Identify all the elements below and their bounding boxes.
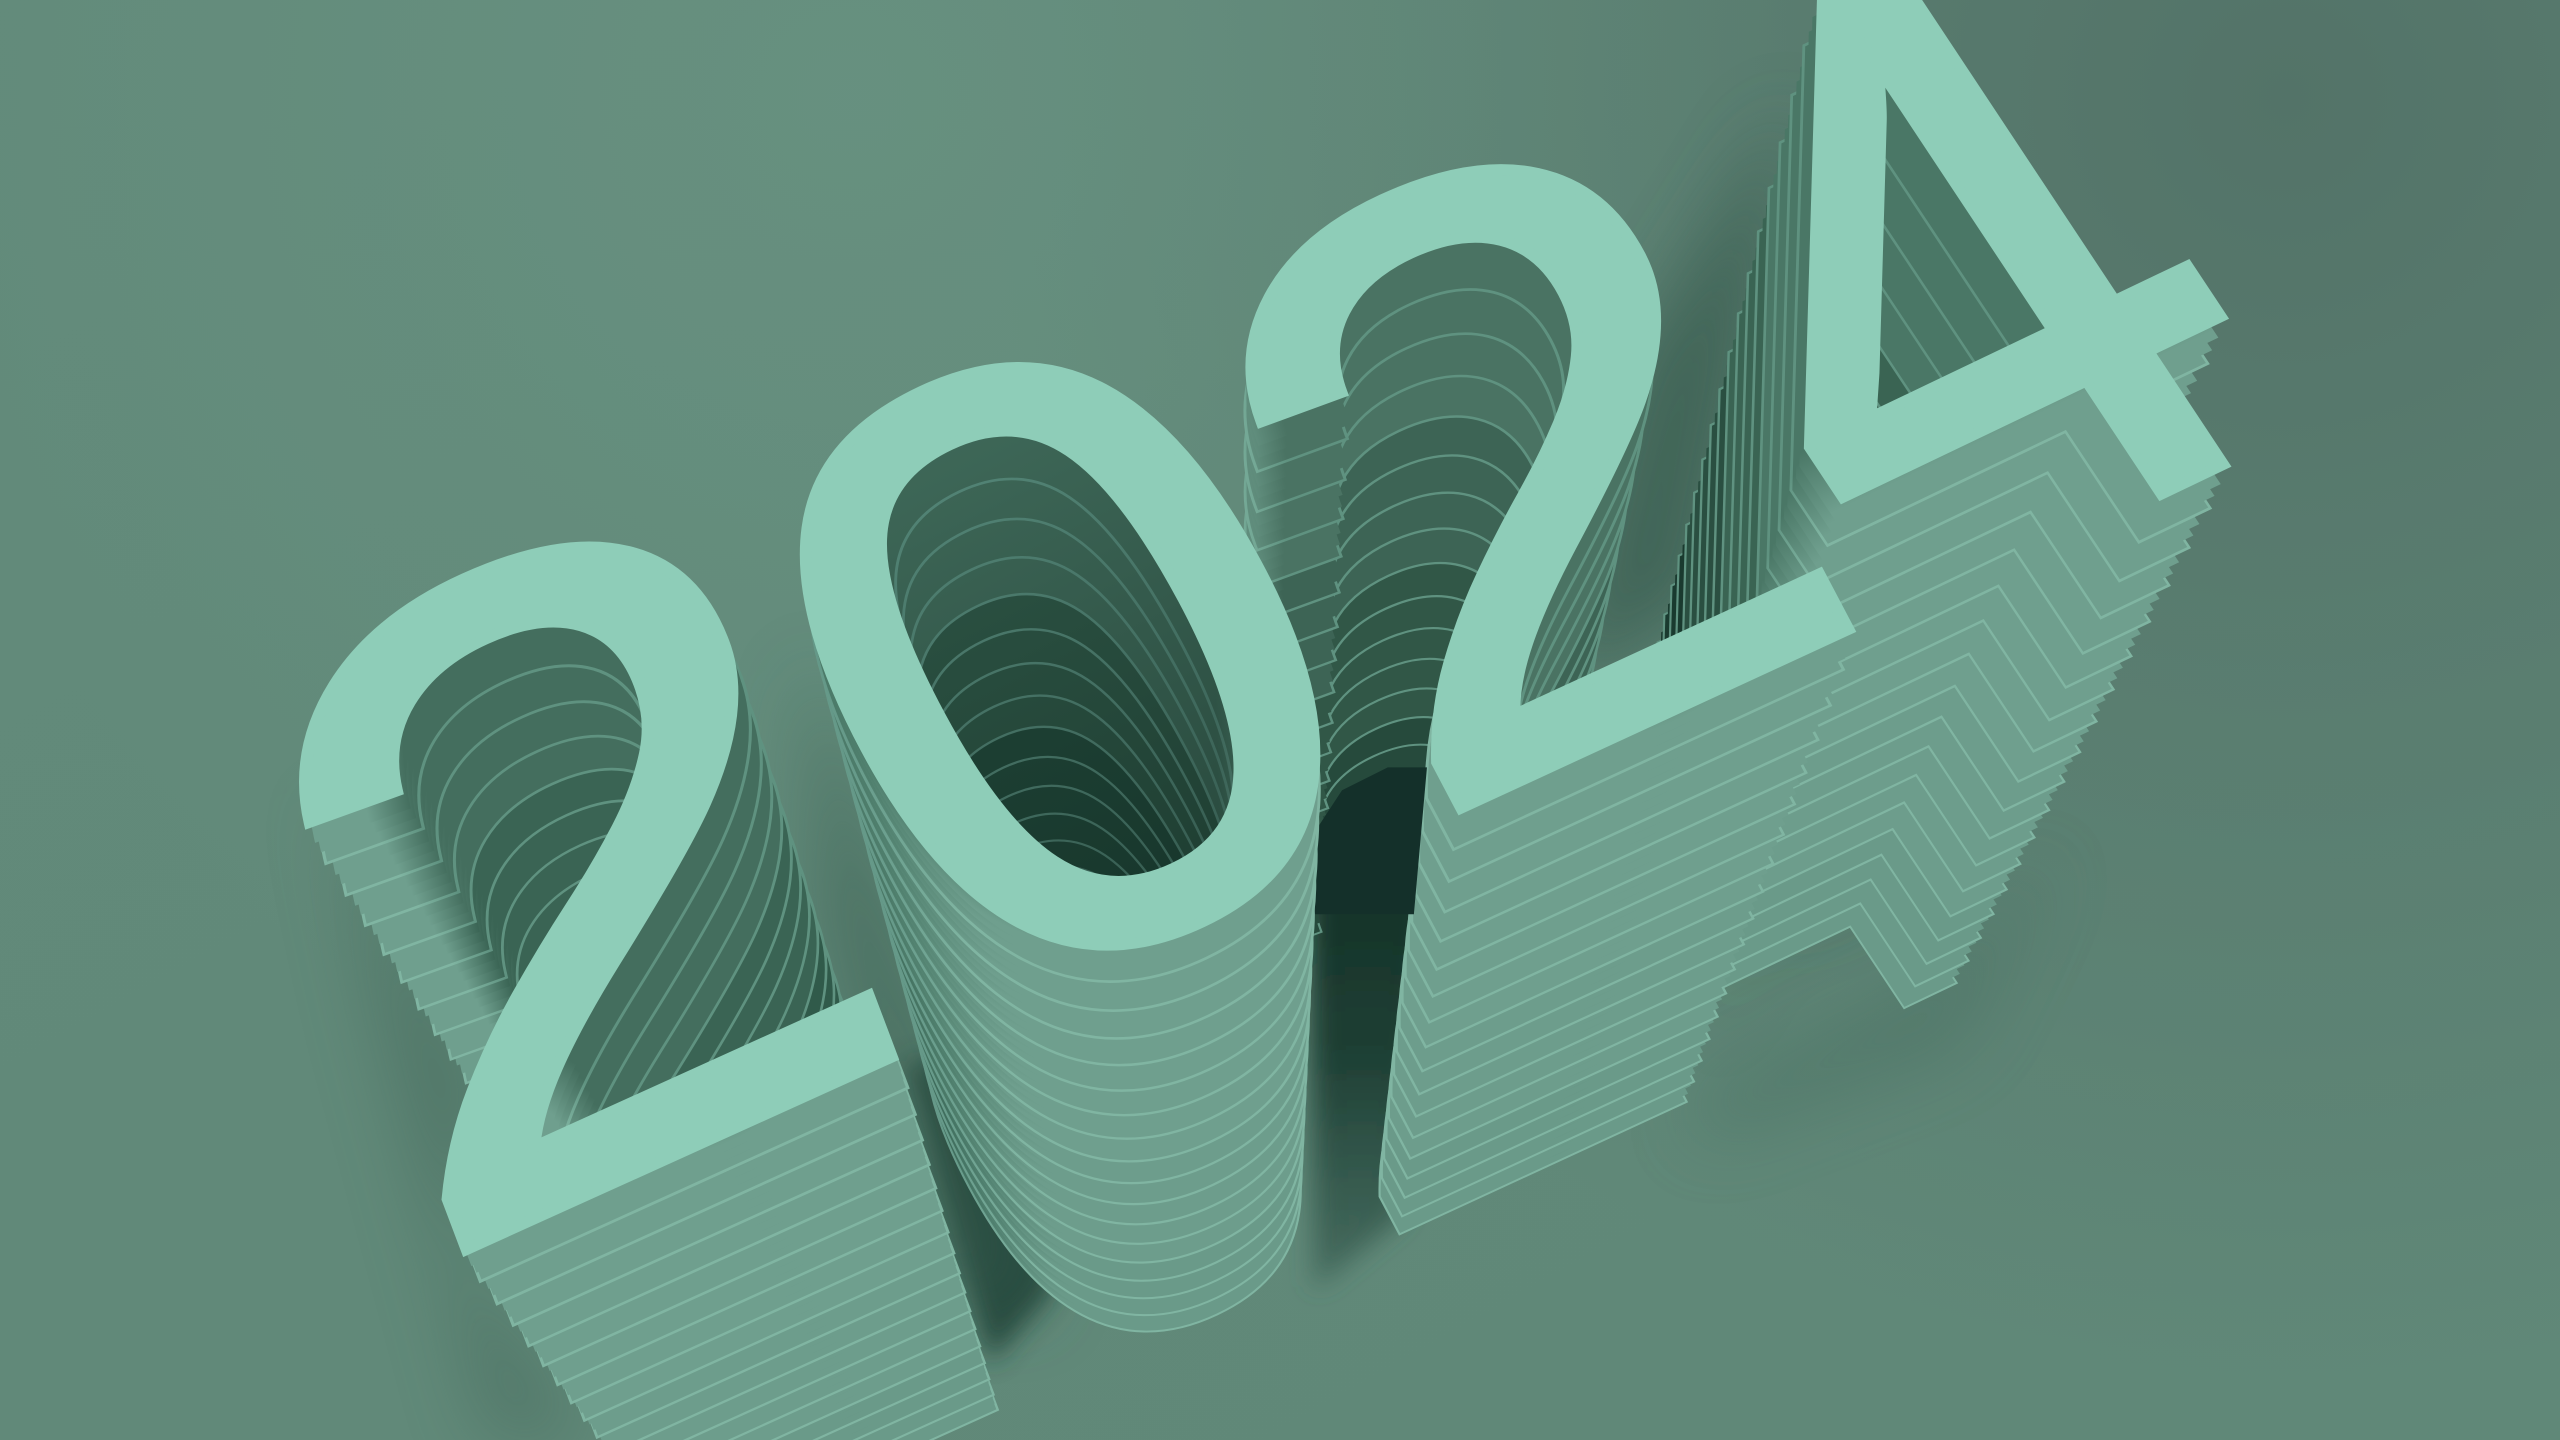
digit: 0: 0 — [732, 546, 1461, 1396]
digit 2 top face: 2 — [140, 293, 1004, 1440]
digit: 0: 0 — [745, 589, 1456, 1418]
digit: 0: 0 — [644, 244, 1497, 1239]
digit: 4: 4 — [1439, 54, 2285, 950]
digit: 0: 0 — [739, 570, 1459, 1408]
digit: 0: 0 — [668, 328, 1487, 1283]
digit: second 2: 2 — [1105, 458, 1815, 1276]
digit: second 2: 2 — [1084, 196, 1895, 1130]
digit: second 2: 2 — [1114, 573, 1780, 1340]
digit: 4: 4 — [1411, 401, 2127, 1159]
digit: 4: 4 — [1415, 346, 2152, 1126]
digit: 4: 4 — [1439, 69, 2279, 958]
digit: 0: 0 — [750, 608, 1454, 1428]
digit: 0: 0 — [767, 666, 1447, 1440]
digit: second 2: 2 — [1073, 42, 1943, 1044]
digit: 0: 0 — [651, 270, 1494, 1253]
digit: second 2: 2 — [1112, 544, 1789, 1324]
digit: second 2: 2 — [1115, 591, 1774, 1350]
digit: 4: 4 — [1433, 127, 2252, 994]
digit: 4: 4 — [1431, 156, 2239, 1011]
digit: 0: 0 — [726, 525, 1464, 1384]
digit: 0: 0 — [730, 537, 1463, 1391]
digit: 0: 0 — [639, 227, 1500, 1230]
digit: 0: 0 — [676, 354, 1484, 1296]
ground shadows — [327, 98, 2057, 1440]
digit: second 2: 2 — [1113, 562, 1783, 1334]
digit: 0: 0 — [765, 659, 1448, 1440]
digit: 4 — [1405, 0, 2420, 1204]
digit: second 2: 2 — [1092, 293, 1866, 1183]
digit: second 2: 2 — [1102, 425, 1825, 1257]
digit: 0: 0 — [684, 381, 1481, 1310]
digit: 0: 0 — [763, 649, 1449, 1440]
digit: second 2: 2 — [1087, 224, 1887, 1145]
digit: 4: 4 — [1439, 69, 2279, 958]
digit: second 2: 2 — [1080, 136, 1913, 1097]
digit: second 2: 2 — [1103, 437, 1822, 1264]
digit: 0: 0 — [676, 354, 1484, 1296]
digit: second 2: 2 — [1111, 533, 1793, 1318]
digit: 0: 0 — [702, 443, 1473, 1342]
digit: 0: 0 — [660, 301, 1491, 1269]
digit: second 2: 2 — [1102, 415, 1828, 1252]
digit: 4: 4 — [1410, 414, 2121, 1166]
digit: second 2: 2 — [1068, 0, 1958, 1016]
digit: second 2: 2 — [1109, 513, 1798, 1307]
digit 0 top face: 0 — [610, 130, 1511, 1180]
digit: second 2: 2 — [1116, 602, 1771, 1356]
digit: 0: 0 — [753, 619, 1452, 1433]
digit: 4: 4 — [1418, 311, 2168, 1104]
digit: second 2: 2 — [1107, 482, 1808, 1290]
digit: 4: 4 — [1436, 99, 2265, 977]
digit: second 2: 2 — [1096, 343, 1850, 1212]
digit: 0: 0 — [699, 431, 1475, 1336]
digit: 4: 4 — [1405, 463, 2098, 1196]
digit: 0: 0 — [625, 180, 1505, 1206]
digit: second 2: 2 — [1114, 580, 1778, 1344]
digit: 0: 0 — [620, 165, 1507, 1198]
digit: 4: 4 — [1443, 24, 2300, 931]
digit: second 2: 2 — [1085, 210, 1891, 1138]
digit: 0: 0 — [730, 537, 1463, 1391]
digit: 4: 4 — [1405, 476, 2093, 1204]
digit: second 2: 2 — [1107, 482, 1808, 1290]
digit: 0: 0 — [759, 639, 1450, 1440]
digit: 0: 0 — [757, 631, 1451, 1440]
digit: 4: 4 — [1414, 355, 2148, 1131]
digit: 0: 0 — [625, 180, 1505, 1206]
digit: 4: 4 — [1446, 0, 2314, 913]
digit: second 2: 2 — [1100, 391, 1836, 1238]
digit: 0: 0 — [681, 369, 1483, 1304]
digit: 4: 4 — [1417, 334, 2158, 1118]
digit: second 2: 2 — [1108, 491, 1805, 1294]
digit: first 2: 2 — [175, 357, 1012, 1440]
digit: 0: 0 — [748, 600, 1455, 1424]
digit: 0: 0 — [630, 198, 1503, 1215]
digit: 4: 4 — [1432, 142, 2245, 1002]
digit: 0: 0 — [616, 151, 1509, 1191]
digit: 4: 4 — [1437, 84, 2272, 968]
digit: 4: 4 — [1443, 24, 2300, 931]
digit: second 2: 2 — [1080, 136, 1913, 1097]
digit: 4: 4 — [1407, 445, 2107, 1185]
digit: 4: 4 — [1412, 380, 2136, 1146]
digit: 4: 4 — [1418, 311, 2168, 1104]
digit: 4: 4 — [1427, 196, 2220, 1035]
digit: 4: 4 — [1424, 236, 2202, 1059]
digit: 4: 4 — [1435, 113, 2259, 985]
digit: 4: 4 — [1415, 346, 2152, 1126]
digit: second 2: 2 — [1106, 470, 1812, 1283]
digit: second 2: 2 — [1076, 90, 1928, 1071]
digit: 0: 0 — [647, 257, 1496, 1246]
digit: second 2: 2 — [1114, 573, 1780, 1340]
digit: second 2: 2 — [1102, 415, 1828, 1252]
digit: 0: 0 — [748, 600, 1455, 1424]
digit: second 2: 2 — [1108, 501, 1802, 1300]
digit: 0: 0 — [706, 456, 1472, 1349]
digit: 4: 4 — [1422, 275, 2185, 1082]
digit: 0: 0 — [709, 468, 1471, 1355]
digit: 4: 4 — [1410, 414, 2121, 1166]
digit: 4: 4 — [1441, 40, 2292, 941]
digit: second 2: 2 — [1076, 90, 1928, 1071]
digit: 0: 0 — [739, 570, 1459, 1408]
digit: second 2: 2 — [1093, 305, 1862, 1191]
digit: 4: 4 — [1408, 433, 2112, 1178]
digit: 4: 4 — [1409, 420, 2117, 1170]
digit: 4: 4 — [1427, 196, 2220, 1035]
digit: 4: 4 — [1431, 156, 2239, 1011]
digit: 0: 0 — [664, 314, 1489, 1275]
digit: 0: 0 — [736, 558, 1460, 1402]
digit: 4: 4 — [1419, 298, 2174, 1096]
digit: 4: 4 — [1425, 222, 2208, 1051]
digit: 0: 0 — [664, 314, 1489, 1275]
digit: second 2: 2 — [1104, 449, 1818, 1271]
digit: second 2: 2 — [1090, 266, 1874, 1169]
digit: 0: 0 — [757, 631, 1451, 1440]
digit: 0: 0 — [695, 419, 1476, 1329]
digit: second 2: 2 — [1093, 305, 1862, 1191]
digit: second 2: 2 — [1083, 181, 1900, 1121]
digit: first 2: 2 — [165, 338, 1009, 1440]
digit: second 2: 2 — [1097, 355, 1847, 1218]
digit: 0: 0 — [723, 513, 1465, 1378]
digit: 4: 4 — [1406, 451, 2103, 1189]
digit: 4: 4 — [1417, 320, 2163, 1110]
digit: 0: 0 — [699, 431, 1475, 1336]
digit: 4: 4 — [1427, 209, 2214, 1043]
digit: second 2: 2 — [1110, 521, 1796, 1312]
digit: second 2: 2 — [1116, 602, 1771, 1356]
digit: second 2: 2 — [1072, 28, 1947, 1036]
digit: 4: 4 — [1444, 9, 2307, 922]
digit: 4: 4 — [1435, 113, 2259, 985]
digit: 4: 4 — [1447, 0, 2322, 902]
digit: first 2: 2 — [165, 338, 1009, 1440]
digit: 4: 4 — [1407, 445, 2107, 1185]
digit: 4: 4 — [1412, 380, 2136, 1146]
digit: first 2: 2 — [150, 312, 1006, 1440]
digit: second 2: 2 — [1109, 513, 1798, 1307]
digit: 4: 4 — [1405, 476, 2093, 1204]
digit: 0: 0 — [672, 341, 1486, 1290]
digit: 4: 4 — [1420, 285, 2180, 1089]
digit: second 2: 2 — [1081, 154, 1908, 1106]
digit: second 2: 2 — [1094, 318, 1858, 1198]
digit: second 2: 2 — [1112, 551, 1787, 1328]
digit: 0: 0 — [765, 659, 1448, 1440]
digit: second 2: 2 — [1099, 380, 1839, 1232]
digit: second 2: 2 — [1083, 181, 1900, 1121]
digit: 0: 0 — [639, 227, 1500, 1230]
digit: 4: 4 — [1423, 262, 2191, 1074]
digit: 4: 4 — [1422, 275, 2185, 1082]
digit: 0: 0 — [651, 270, 1494, 1253]
digit: second 2: 2 — [1077, 108, 1922, 1081]
digit: 0: 0 — [742, 578, 1457, 1412]
digit: 0: 0 — [719, 503, 1466, 1373]
digit: second 2: 2 — [1098, 367, 1843, 1225]
digit: second 2: 2 — [1068, 0, 1958, 1016]
digit: 0: 0 — [688, 394, 1480, 1317]
digit: 4: 4 — [1412, 389, 2133, 1151]
digit: second 2: 2 — [1104, 449, 1818, 1271]
digit: second 2: 2 — [1112, 544, 1789, 1324]
digit: 0: 0 — [716, 490, 1468, 1367]
digit: 0: 0 — [688, 394, 1480, 1317]
digit: 4: 4 — [1447, 0, 2322, 902]
digit: second 2: 2 — [1067, 0, 1963, 1007]
digit: second 2: 2 — [1096, 343, 1850, 1212]
digit: 4: 4 — [1424, 249, 2197, 1067]
digit: second 2: 2 — [1087, 224, 1887, 1145]
digit: 4: 4 — [1413, 367, 2142, 1138]
digit: 0: 0 — [634, 212, 1501, 1223]
digit: second 2: 2 — [1089, 252, 1878, 1161]
digit: second 2: 2 — [1088, 240, 1882, 1154]
digit: second 2: 2 — [1095, 331, 1854, 1205]
digit: 0: 0 — [656, 288, 1492, 1262]
digit: 0: 0 — [719, 503, 1466, 1373]
digit: second 2: 2 — [1078, 122, 1918, 1089]
digit: 4: 4 — [1430, 169, 2233, 1019]
digit: 0: 0 — [692, 408, 1478, 1324]
digit: first 2: 2 — [157, 325, 1008, 1440]
digit: second 2: 2 — [1074, 61, 1936, 1055]
digit: second 2: 2 — [1070, 13, 1951, 1027]
digit: 4: 4 — [1429, 183, 2226, 1027]
digit: 0: 0 — [712, 479, 1469, 1361]
digit: second 2: 2 — [1090, 266, 1874, 1169]
digit: second 2: 2 — [1101, 403, 1832, 1245]
digit: 0: 0 — [709, 468, 1471, 1355]
digit: second 2: 2 — [1091, 279, 1870, 1176]
digit: 4: 4 — [1424, 236, 2202, 1059]
digit: second 2: 2 — [1099, 380, 1839, 1232]
digit: second 2: 2 — [1073, 42, 1943, 1044]
digit: second 2: 2 — [1082, 168, 1904, 1114]
digit: second 2: 2 — [1075, 76, 1932, 1063]
